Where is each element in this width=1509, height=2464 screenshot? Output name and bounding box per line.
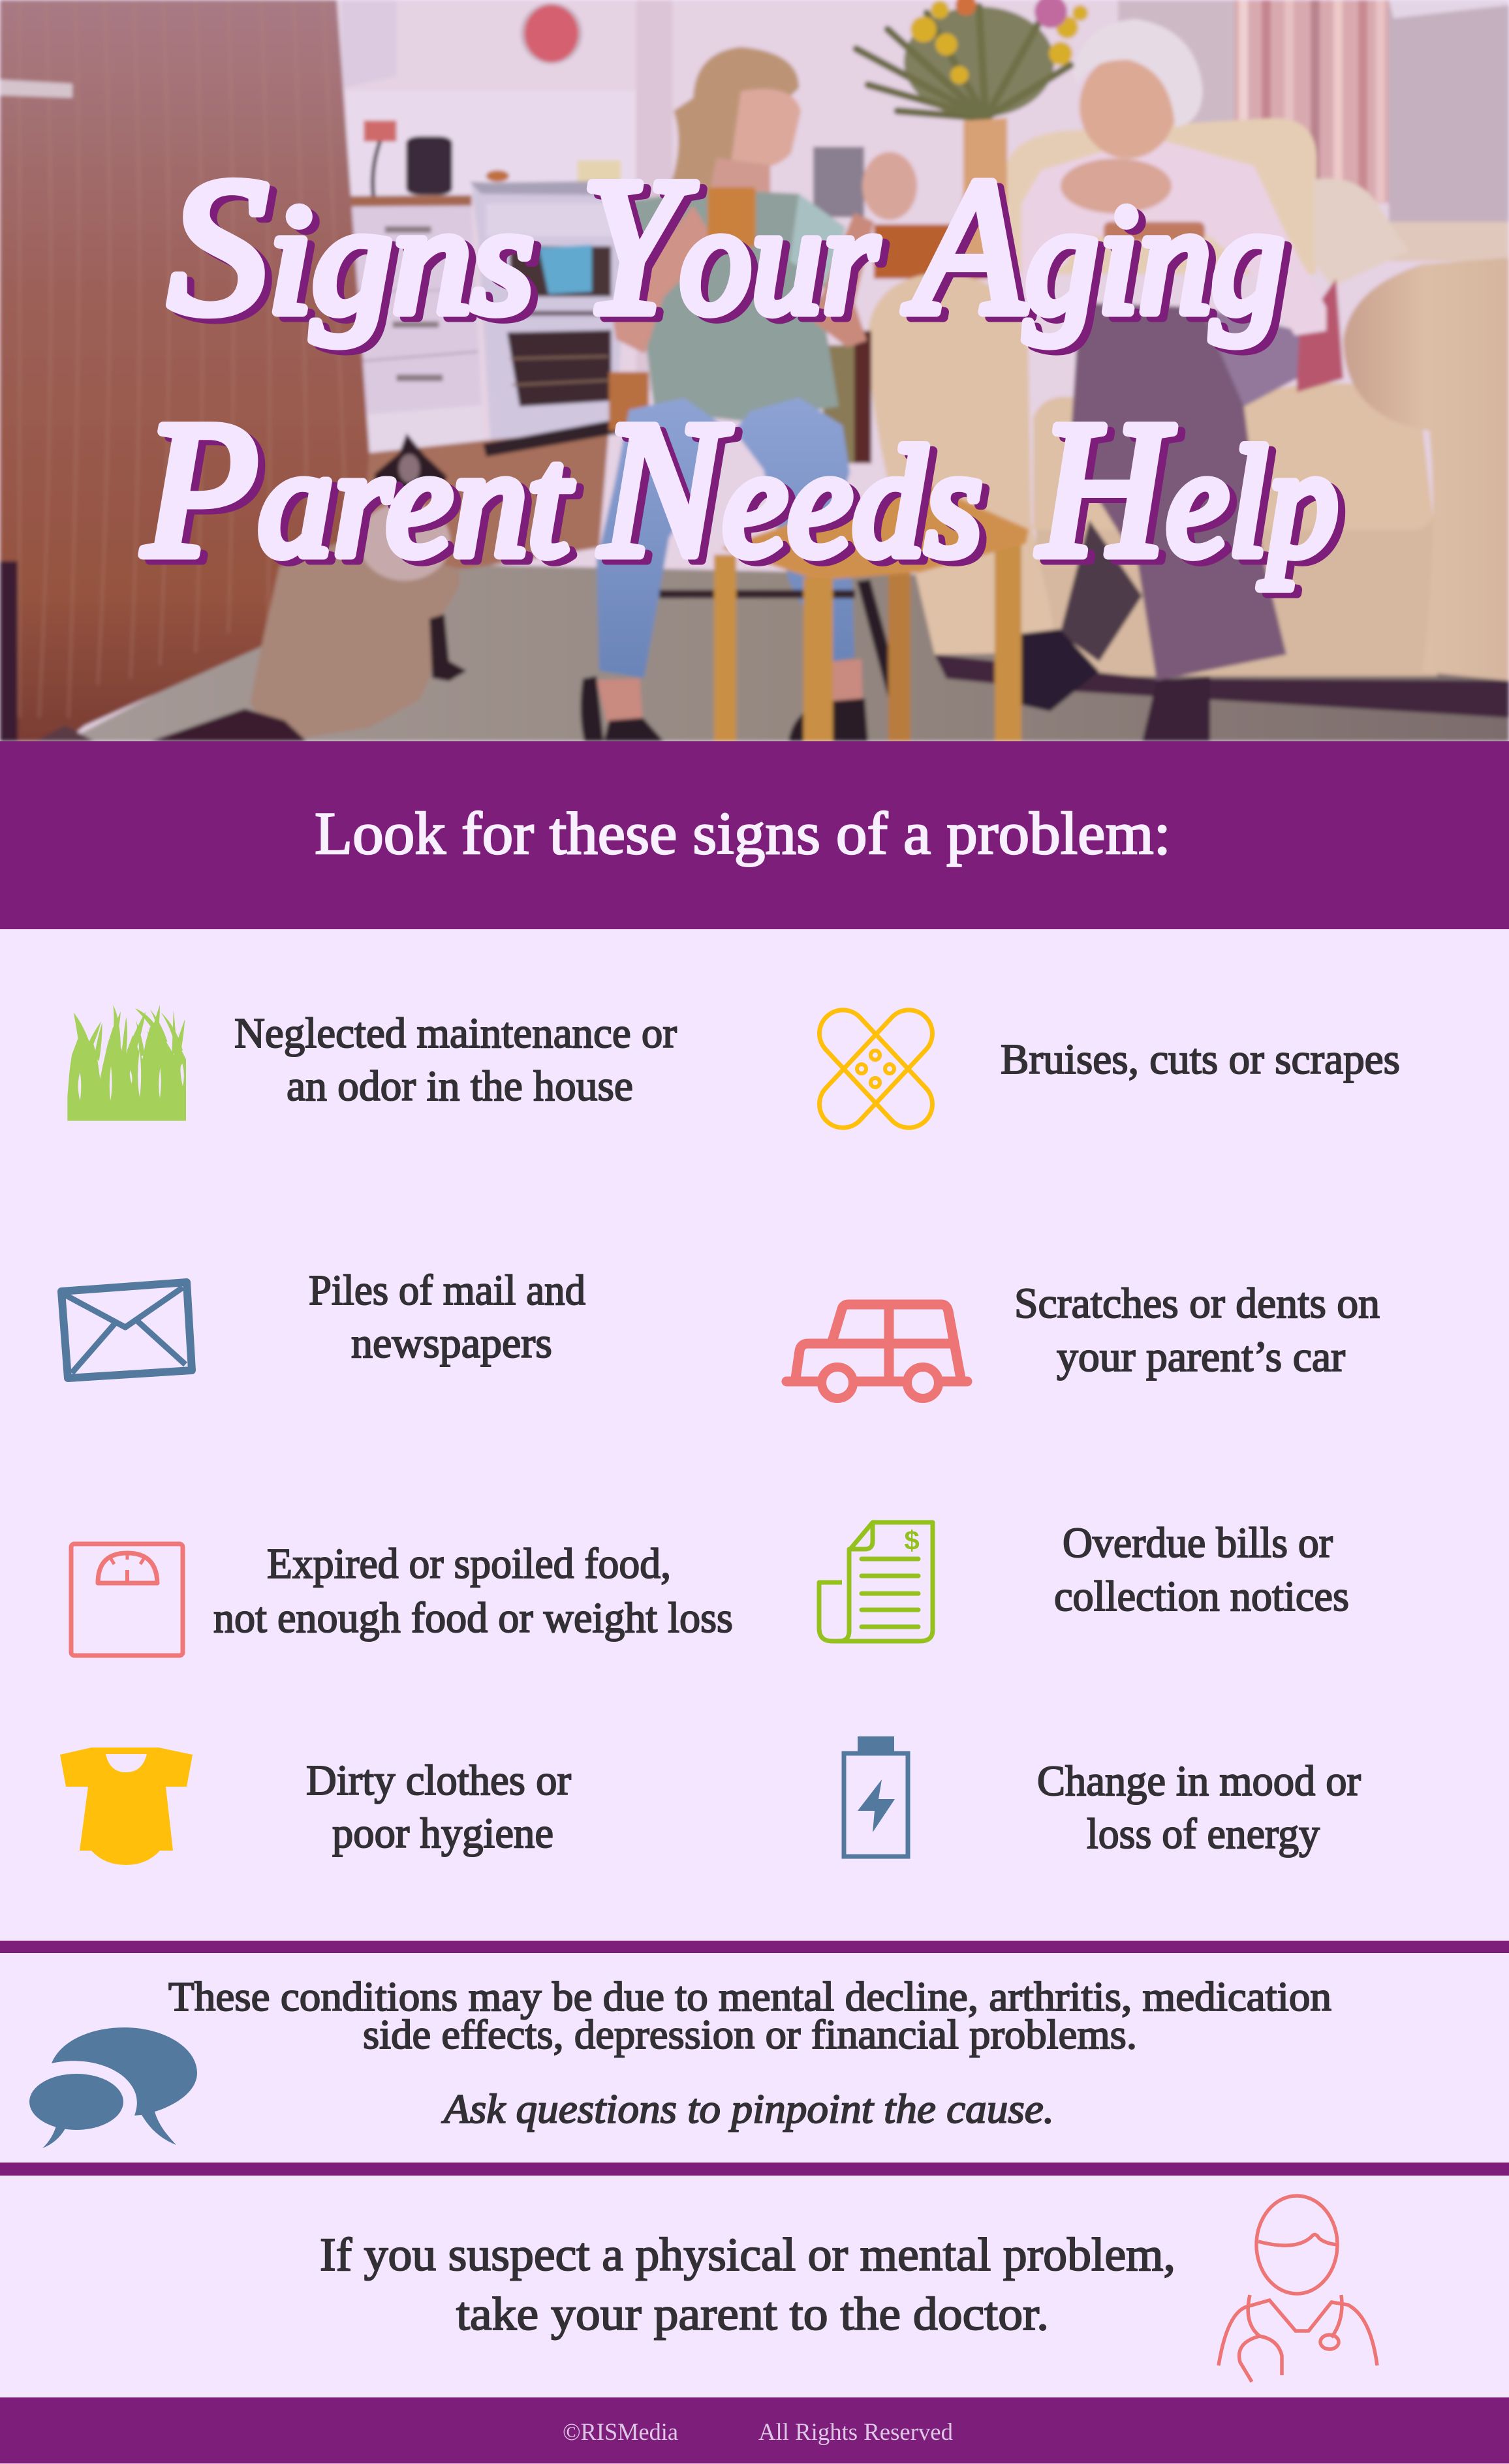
icon: car: [786, 1304, 967, 1398]
icon: bandage: [810, 1000, 942, 1137]
sofa back: [1007, 118, 1316, 274]
sofa left arm: [867, 273, 1057, 654]
icon: bills: [819, 1522, 933, 1641]
icon: speech bubbles: [29, 2027, 197, 2148]
text: conditions: side effects, depression or financial problems.: [363, 2011, 1137, 2057]
title: Signs Your Aging Parent Needs Help: Signs: [168, 138, 534, 354]
elderly woman: [1070, 303, 1299, 681]
divider band: [0, 1941, 1509, 1953]
text: scratches: Scratches or dents on: [1014, 1280, 1380, 1327]
footer band: [0, 2397, 1509, 2463]
stool: [714, 555, 736, 741]
text: neglected maintenance: an odor in the house: [287, 1062, 633, 1110]
sofa seat and front: [1036, 516, 1437, 676]
text: dirty clothes: [306, 1757, 571, 1857]
heading text: Look for these signs of a problem:: [315, 800, 1171, 867]
text: see doctor: If you suspect a physical or mental problem,: [320, 2228, 1175, 2281]
back walls: [1118, 0, 1236, 124]
text: see doctor: take your parent to the doctor.: [456, 2288, 1049, 2340]
text: change in mood: loss of energy: [1087, 1810, 1320, 1858]
text: piles of mail: [309, 1267, 585, 1367]
curtain: [1234, 0, 1389, 203]
title: Signs Your Aging Parent Needs Help: Your: [581, 138, 879, 354]
icon: grass: [67, 1005, 186, 1121]
icon: t-shirt: [60, 1748, 193, 1865]
title: Signs Your Aging Parent Needs Help: Needs: [598, 380, 982, 597]
title: Signs Your Aging Parent Needs Help: Aging: [903, 138, 1284, 354]
text: ask questions: Ask questions to pinpoint the cause.: [441, 2086, 1054, 2132]
icon: doctor: [1219, 2196, 1377, 2382]
text: see doctor: [320, 2228, 1175, 2340]
hero photo: carer and elderly parent in living room: [0, 0, 1509, 741]
icon: weighing scale: [71, 1544, 183, 1656]
text: expired food: [213, 1540, 733, 1642]
chair: [609, 372, 649, 431]
younger woman: [669, 47, 799, 189]
text: dirty clothes: poor hygiene: [332, 1810, 553, 1857]
icon: envelope: [61, 1282, 192, 1378]
footer text: copyright: ©RISMedia: [563, 2419, 678, 2446]
text: expired food: not enough food or weight loss: [213, 1594, 733, 1642]
sideboard and flowers: [874, 224, 1002, 279]
title: Signs Your Aging Parent Needs Help: Parent: [141, 380, 572, 597]
text: overdue bills: collection notices: [1054, 1573, 1349, 1620]
icon: bills: $: [904, 1525, 920, 1556]
bottom edge strip: [0, 2463, 1509, 2464]
title: Signs Your Aging Parent Needs Help: [141, 138, 1338, 597]
icon: battery: [844, 1736, 908, 1856]
sofa right arm: [1343, 258, 1509, 681]
text: dirty clothes: Dirty clothes or: [306, 1757, 571, 1804]
text: change in mood: Change in mood or: [1037, 1757, 1361, 1805]
text: overdue bills: [1054, 1519, 1349, 1620]
text: scratches: [1014, 1280, 1380, 1381]
cat: [250, 538, 459, 741]
text: neglected maintenance: [234, 1009, 677, 1110]
divider band: [0, 2163, 1509, 2176]
text: piles of mail: Piles of mail and: [309, 1267, 585, 1314]
kitchen area: [341, 0, 635, 454]
text: conditions: These conditions may be due to mental decline, arthritis, medication: [168, 1973, 1331, 2020]
text: conditions: [168, 1973, 1331, 2132]
text: piles of mail: newspapers: [351, 1319, 552, 1367]
door: [0, 0, 369, 741]
footer text: rights: All Rights Reserved: [758, 2419, 953, 2446]
text: expired food: Expired or spoiled food,: [267, 1540, 671, 1588]
text: change in mood: [1037, 1757, 1361, 1858]
text: scratches: your parent’s car: [1057, 1333, 1345, 1381]
carpet and floors: [65, 564, 1509, 741]
text: neglected maintenance: Neglected maintenance or: [234, 1009, 677, 1057]
heading band: [0, 741, 1509, 929]
text: overdue bills: Overdue bills or: [1063, 1519, 1333, 1567]
text: bruises: Bruises, cuts or scrapes: [1001, 1036, 1400, 1083]
title: Signs Your Aging Parent Needs Help: Help: [1036, 380, 1338, 597]
